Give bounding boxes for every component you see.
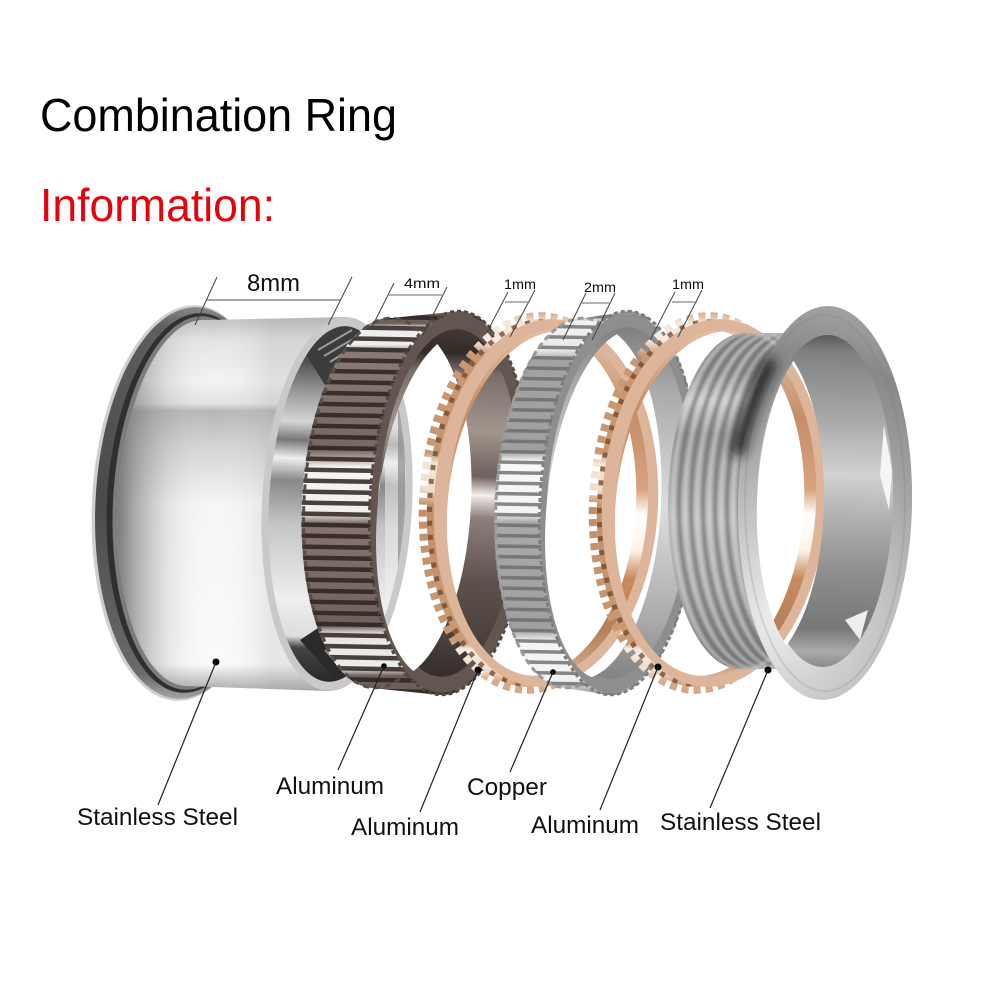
dimension: 1mm right: [650, 276, 704, 340]
solid tooth base: [596, 319, 710, 687]
ring 1: stainless steel sleeve: [82, 300, 422, 706]
inner wall: [754, 334, 896, 668]
teeth: [588, 312, 751, 694]
inner wall: [448, 330, 648, 666]
ring 2: aluminum knurled brown: [301, 310, 519, 696]
callout: aluminum 3: [531, 664, 662, 839]
dimension: 8mm: 8mm: [247, 270, 300, 297]
callout: stainless steel left: Stainless Steel: [77, 804, 238, 831]
dark notches: [600, 322, 712, 684]
callout: aluminum 2: Aluminum: [351, 814, 459, 841]
ring 3: aluminum toothed rose ring: [413, 310, 667, 696]
dimension: 8mm: [195, 270, 352, 325]
callout: copper: [467, 669, 556, 801]
dimension: 2mm: [563, 279, 616, 340]
callout: aluminum 2: [351, 666, 482, 841]
knurled outer surface: [486, 311, 700, 695]
dimension: 4mm: [372, 275, 447, 335]
toothed top edge and front face: [368, 310, 519, 696]
heading: information: Information:: [40, 179, 275, 231]
cylinder body: [117, 317, 413, 691]
callout: aluminum 3: Aluminum: [531, 812, 639, 839]
callout: copper: Copper: [467, 774, 547, 801]
flange: [82, 300, 290, 706]
dimension: 1mm left: [487, 276, 536, 337]
face: [602, 319, 824, 687]
inner wall: [547, 328, 683, 678]
solid tooth base: [426, 319, 539, 687]
front face: [538, 310, 688, 696]
callout: aluminum 1: Aluminum: [276, 773, 384, 800]
head flange: [735, 305, 915, 701]
end rim and inner wall: [262, 318, 412, 691]
dimension: 1mm left: 1mm: [504, 276, 536, 292]
inner wall: [616, 330, 816, 676]
dimension: 4mm: 4mm: [404, 275, 440, 291]
callout: aluminum 1: [276, 663, 387, 800]
ring 6: stainless steel grooved ring: [668, 305, 915, 701]
dark notches: [430, 322, 544, 684]
grooved cylinder: [668, 333, 784, 669]
knurled outer surface: [294, 311, 531, 695]
callout: stainless steel right: [660, 666, 821, 836]
inner wall: [378, 329, 512, 677]
face: [434, 319, 658, 687]
callout: stainless steel left: [77, 658, 238, 831]
dimension: 2mm: 2mm: [584, 279, 616, 295]
title: Combination Ring: [40, 89, 397, 141]
teeth: [418, 312, 570, 694]
ring 5: aluminum toothed rose ring: [583, 311, 835, 695]
dimension: 1mm right: 1mm: [672, 276, 704, 292]
callout: stainless steel right: Stainless Steel: [660, 809, 821, 836]
ring 4: copper knurled silver ring: [494, 310, 688, 696]
